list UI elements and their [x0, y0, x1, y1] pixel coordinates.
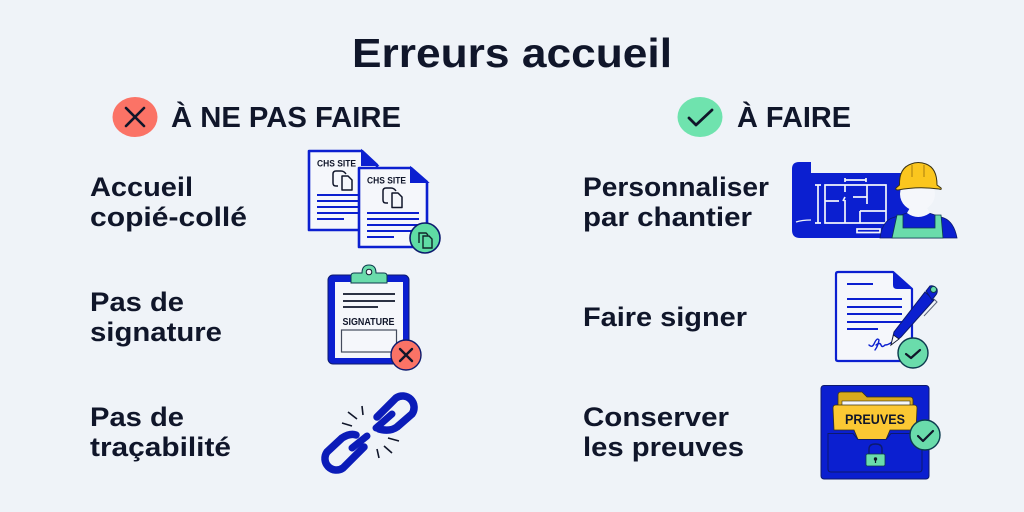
text: pas de signature: Pas de [90, 287, 184, 317]
icon: copied documents [309, 151, 440, 253]
icon: broken chain [325, 396, 414, 470]
text: pas de traçabilité [90, 402, 231, 462]
heading: à faire: À FAIRE [737, 100, 851, 134]
panel: à ne pas faire [90, 97, 440, 470]
title: Erreurs accueil [352, 30, 672, 76]
text: conserver les preuves [583, 402, 744, 462]
text: accueil copié-collé: copié-collé [90, 202, 247, 232]
text: faire signer: Faire signer [583, 302, 748, 332]
icon: clipboard signature [328, 265, 421, 370]
icon: signed document [836, 272, 937, 368]
panel: à faire [583, 97, 957, 479]
text: conserver les preuves: Conserver [583, 402, 730, 432]
text: accueil copié-collé: Accueil [90, 172, 193, 202]
text: conserver les preuves: les preuves [583, 432, 744, 462]
text: pas de traçabilité: Pas de [90, 402, 184, 432]
icon: clipboard signature: SIGNATURE [342, 317, 395, 328]
text: pas de signature: signature [90, 317, 222, 347]
heading: à ne pas faire: À NE PAS FAIRE [171, 100, 401, 134]
text: personnaliser par chantier: par chantier [583, 202, 753, 232]
heading: à ne pas faire [112, 97, 401, 137]
icon: evidence folder: PREUVES [845, 412, 905, 427]
text: pas de signature [90, 287, 222, 347]
text: pas de traçabilité: traçabilité [90, 432, 231, 462]
icon: blueprint and worker [792, 162, 957, 238]
icon: copied documents: CHS SITE [317, 158, 356, 168]
text: personnaliser par chantier: Personnaliser [583, 172, 770, 202]
text: personnaliser par chantier [583, 172, 770, 232]
text: accueil copié-collé [90, 172, 247, 232]
icon: evidence folder [821, 386, 940, 479]
icon: copied documents: CHS SITE [367, 176, 406, 186]
heading: à faire [678, 97, 851, 137]
worker [880, 162, 957, 238]
